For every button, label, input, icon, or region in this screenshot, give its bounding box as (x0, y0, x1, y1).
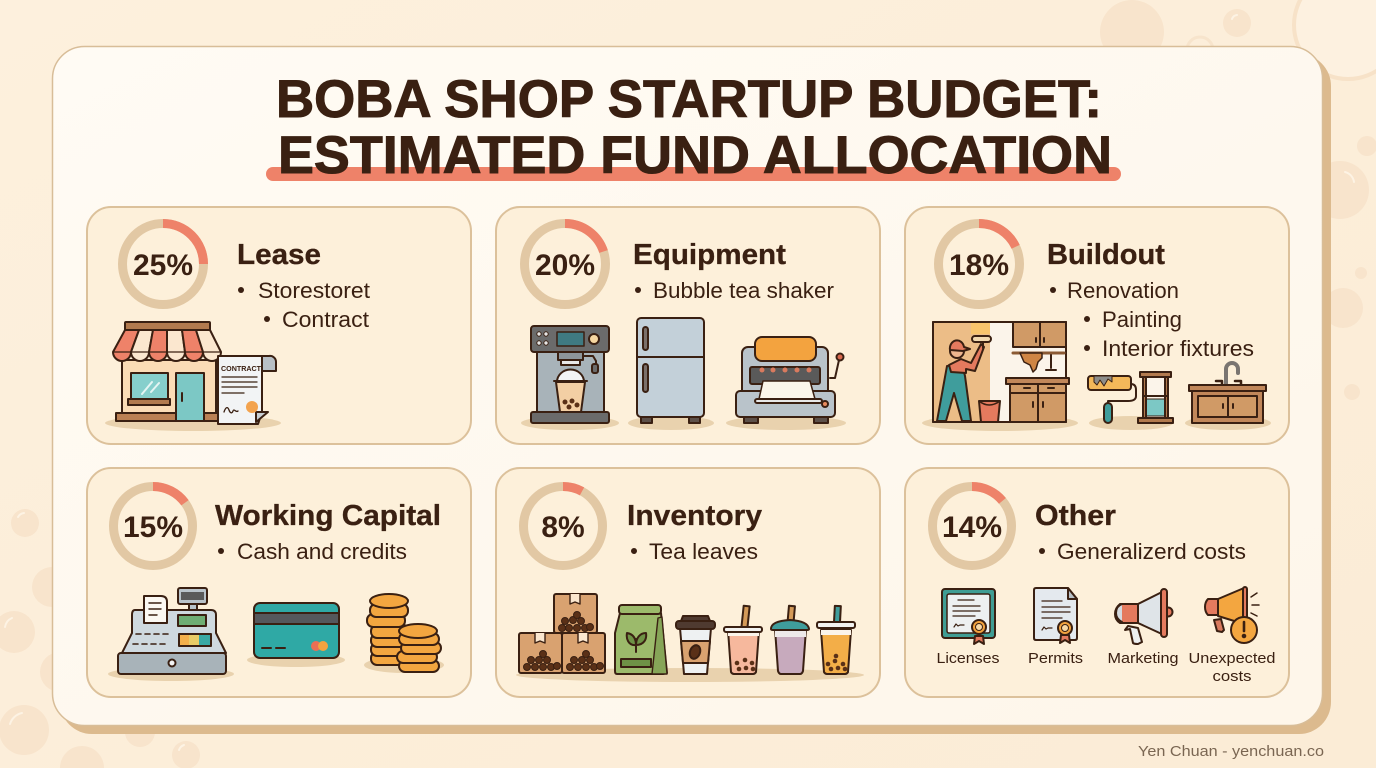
icon: tea leaf bag (615, 605, 667, 674)
icon: sink cabinet (1185, 363, 1271, 430)
icon: paint roller (1088, 376, 1173, 430)
icon: storefront and contract (105, 322, 281, 431)
heading: Other: Other (1035, 500, 1116, 532)
icon: license certificate (942, 589, 995, 644)
icon: storefront and contract: CONTRACT (221, 364, 261, 373)
icon: window frame (1138, 372, 1173, 423)
donut: 25% (122, 224, 204, 304)
title (266, 70, 1121, 185)
icon: credit card (247, 603, 345, 667)
bullets: lease: Storestoret (258, 278, 370, 303)
heading: Lease: Lease (237, 239, 321, 271)
icon: refrigerator (628, 318, 714, 430)
heading: Working Capital: Working Capital (215, 500, 441, 532)
title: ESTIMATED FUND ALLOCATION (278, 126, 1112, 185)
icon: unexpected costs megaphone (1205, 587, 1259, 643)
bullets: lease: Contract (282, 307, 369, 332)
panel: inventory (496, 468, 880, 697)
panel: working capital (87, 468, 471, 697)
shadow: inventory row (516, 668, 864, 682)
icon: coin stacks (364, 594, 444, 673)
heading: Inventory: Inventory (627, 500, 762, 532)
donut: 20%: 20% (535, 249, 595, 282)
bullets: buildout: Interior fixtures (1102, 336, 1254, 361)
donut: 15%: 15% (123, 511, 183, 544)
icon: megaphone (1115, 589, 1172, 644)
icon: cup sealer (726, 337, 846, 430)
bullets: buildout: Renovation (1067, 278, 1179, 303)
label: Unexpected costs (1188, 650, 1276, 685)
donut: 25%: 25% (133, 249, 193, 282)
heading: Equipment: Equipment (633, 239, 786, 271)
label: Unexpected costs: costs (1212, 668, 1252, 685)
bullets: working capital: Cash and credits (237, 539, 407, 564)
panel: buildout (905, 207, 1289, 444)
icon: permit document (1034, 588, 1077, 643)
donut: 18% (938, 224, 1020, 304)
donut: 14%: 14% (942, 511, 1002, 544)
label: Marketing: Marketing (1108, 650, 1178, 667)
bullets: equipment: Bubble tea shaker (653, 278, 834, 303)
donut: 20% (524, 224, 606, 304)
icon: mango boba cup (817, 606, 855, 674)
title: BOBA SHOP STARTUP BUDGET: (276, 70, 1102, 129)
icon: boba boxes (519, 594, 605, 673)
donut: 18%: 18% (949, 249, 1009, 282)
footer credit: Yen Chuan - yenchuan.co (1138, 743, 1324, 760)
donut: 14% (932, 486, 1012, 566)
bullets: buildout (1050, 278, 1254, 361)
icon: coffee cup (676, 616, 715, 674)
bullets: buildout: Painting (1102, 307, 1182, 332)
bullets: inventory: Tea leaves (649, 539, 758, 564)
donut: 15% (114, 486, 192, 566)
panel: equipment (496, 207, 880, 444)
donut: 8% (524, 486, 602, 566)
label: Licenses: Licenses (936, 650, 1000, 667)
panel: lease (87, 207, 471, 444)
icon: taro boba cup (771, 606, 809, 674)
icon: renovation scene (922, 322, 1078, 431)
icon: espresso machine (521, 326, 619, 430)
bullets: other: Generalizerd costs (1057, 539, 1246, 564)
bullets: lease (238, 278, 370, 332)
label: Permits: Permits (1028, 650, 1083, 667)
heading: Buildout: Buildout (1047, 239, 1165, 271)
donut: 8%: 8% (541, 511, 585, 544)
icon: peach boba cup (724, 606, 762, 674)
label: Unexpected costs: Unexpected (1188, 650, 1276, 667)
icon: cash register (108, 588, 234, 681)
panel: other (905, 468, 1289, 697)
